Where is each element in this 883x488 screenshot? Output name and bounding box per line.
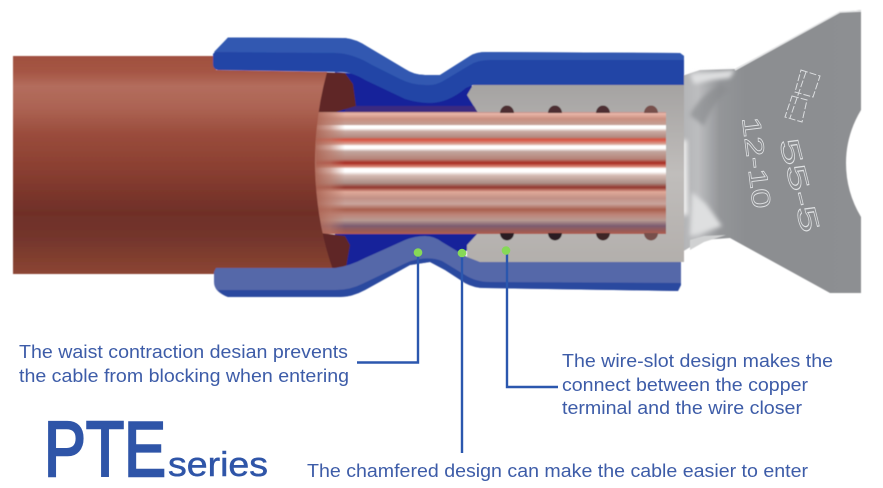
callout line: waist contraction xyxy=(357,248,422,362)
marker dot xyxy=(502,246,510,255)
red cable jacket xyxy=(13,56,333,274)
marker dot xyxy=(458,249,466,257)
wire slots xyxy=(500,106,658,241)
callout line: wire-slot design xyxy=(502,246,558,387)
title: PTE series: series xyxy=(168,446,268,484)
blue sleeve upper xyxy=(213,38,684,103)
lug text: 12-10: 12-10 xyxy=(736,115,777,210)
marker dot xyxy=(414,248,422,257)
icon: maker logo xyxy=(785,70,820,122)
text block: waist contraction: The waist contraction desian prevents xyxy=(19,342,348,362)
text block: waist contraction xyxy=(19,342,349,386)
text block: wire-slot design: connect between the copper xyxy=(562,375,808,395)
copper wire strands xyxy=(312,106,666,241)
copper terminal barrel xyxy=(467,85,684,262)
text block: wire-slot design: The wire-slot design makes the xyxy=(562,351,833,371)
navy sleeve interior xyxy=(335,72,490,270)
text block: wire-slot design xyxy=(562,351,833,418)
terminal illustration xyxy=(13,10,861,297)
text block: wire-slot design: terminal and the wire closer xyxy=(562,398,802,418)
title: PTE series xyxy=(44,405,268,488)
cable cut rim xyxy=(312,72,356,270)
blue sleeve lower xyxy=(214,236,681,297)
silver ring lug xyxy=(680,10,861,293)
callout line: chamfered design xyxy=(458,249,466,453)
lug text: 55-5: 55-5 xyxy=(773,135,826,236)
text block: waist contraction: the cable from blocking when entering xyxy=(19,366,349,386)
lug stamped marks xyxy=(736,70,826,236)
text block: chamfered design: The chamfered design can make the cable easier to enter xyxy=(307,461,808,481)
